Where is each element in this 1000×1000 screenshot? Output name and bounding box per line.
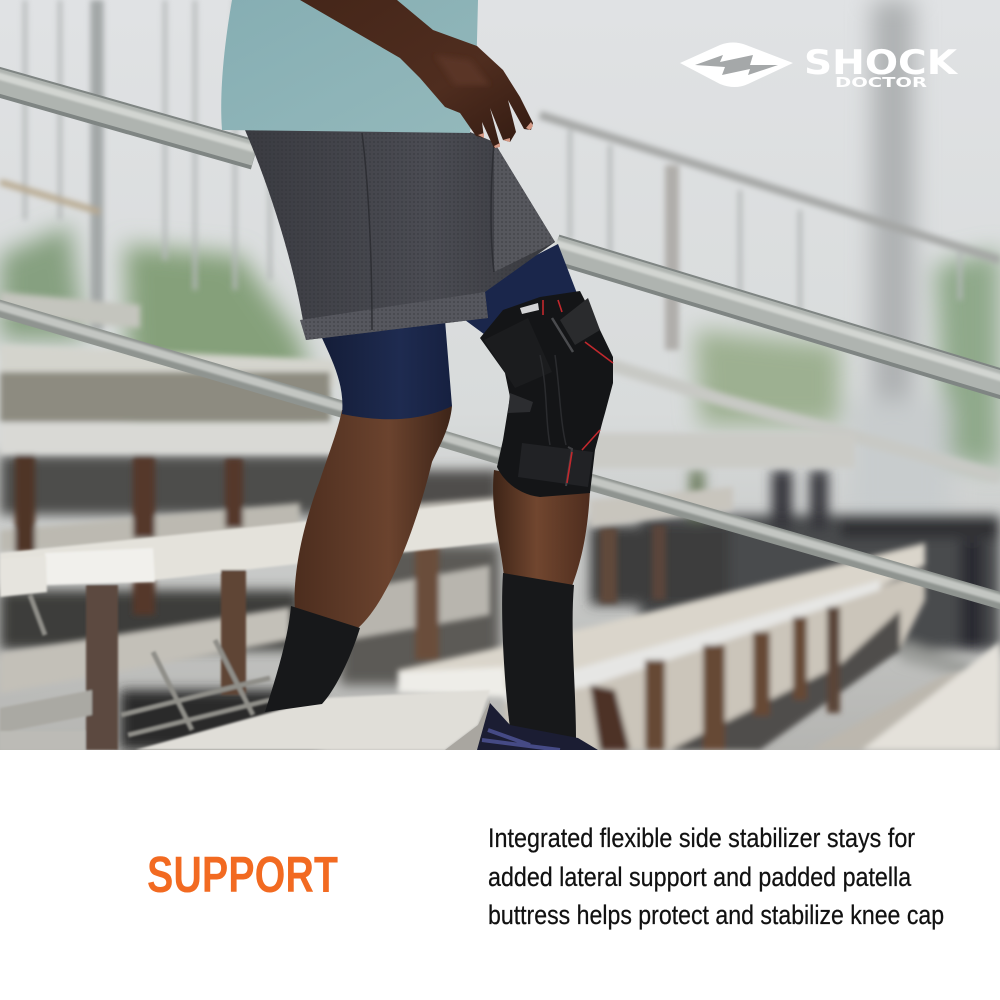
background: dark stands at right — [0, 455, 1000, 750]
text block: product description: Integrated flexible side stabilizer stays for — [488, 823, 915, 853]
logo wordmark: DOCTOR — [835, 75, 928, 91]
background: blurred stadium — [0, 0, 1000, 750]
arm and hand — [300, 0, 533, 148]
text block: product description: added lateral support and padded patella — [488, 862, 911, 892]
bleachers: foreground benches and posts — [0, 500, 1000, 750]
bench: left foreground — [0, 500, 500, 750]
logo: Shock Doctor — [680, 42, 959, 91]
heading: support: SUPPORT — [147, 846, 338, 903]
front leg: shin — [493, 470, 590, 586]
brace: left panel — [484, 318, 552, 388]
brace: label — [520, 303, 539, 314]
text block: product description — [488, 823, 944, 930]
text block: product description: buttress helps protect and stabilize knee cap — [488, 900, 944, 930]
bench: stair under back foot — [135, 690, 490, 750]
background: greenery and pole — [0, 0, 1000, 520]
shorts — [245, 130, 555, 340]
brace: lower strap — [518, 443, 593, 487]
front foot: shoe — [477, 703, 598, 750]
brace: patella patch — [508, 393, 533, 413]
logo mark: bolt diamond — [680, 42, 793, 87]
athlete — [221, 0, 613, 750]
handrail: upper — [0, 75, 1000, 385]
front leg: compression tight — [465, 244, 578, 340]
back leg: compression tight — [322, 320, 452, 419]
shirt — [221, 0, 478, 133]
bench: right foreground — [398, 543, 1000, 750]
back leg: calf — [295, 406, 452, 628]
photo: athlete climbing bleacher stairs wearing knee brace — [0, 0, 1000, 750]
brace: red accent lines — [543, 300, 613, 483]
back leg: sock — [265, 606, 360, 712]
logo wordmark: SHOCK — [804, 43, 959, 83]
handrail: lower — [0, 305, 1000, 602]
background: railing bars — [0, 0, 1000, 477]
knee brace — [480, 291, 613, 497]
front leg: sock — [502, 573, 576, 738]
background: far benches — [0, 292, 855, 693]
brace: upper strap — [560, 298, 600, 345]
